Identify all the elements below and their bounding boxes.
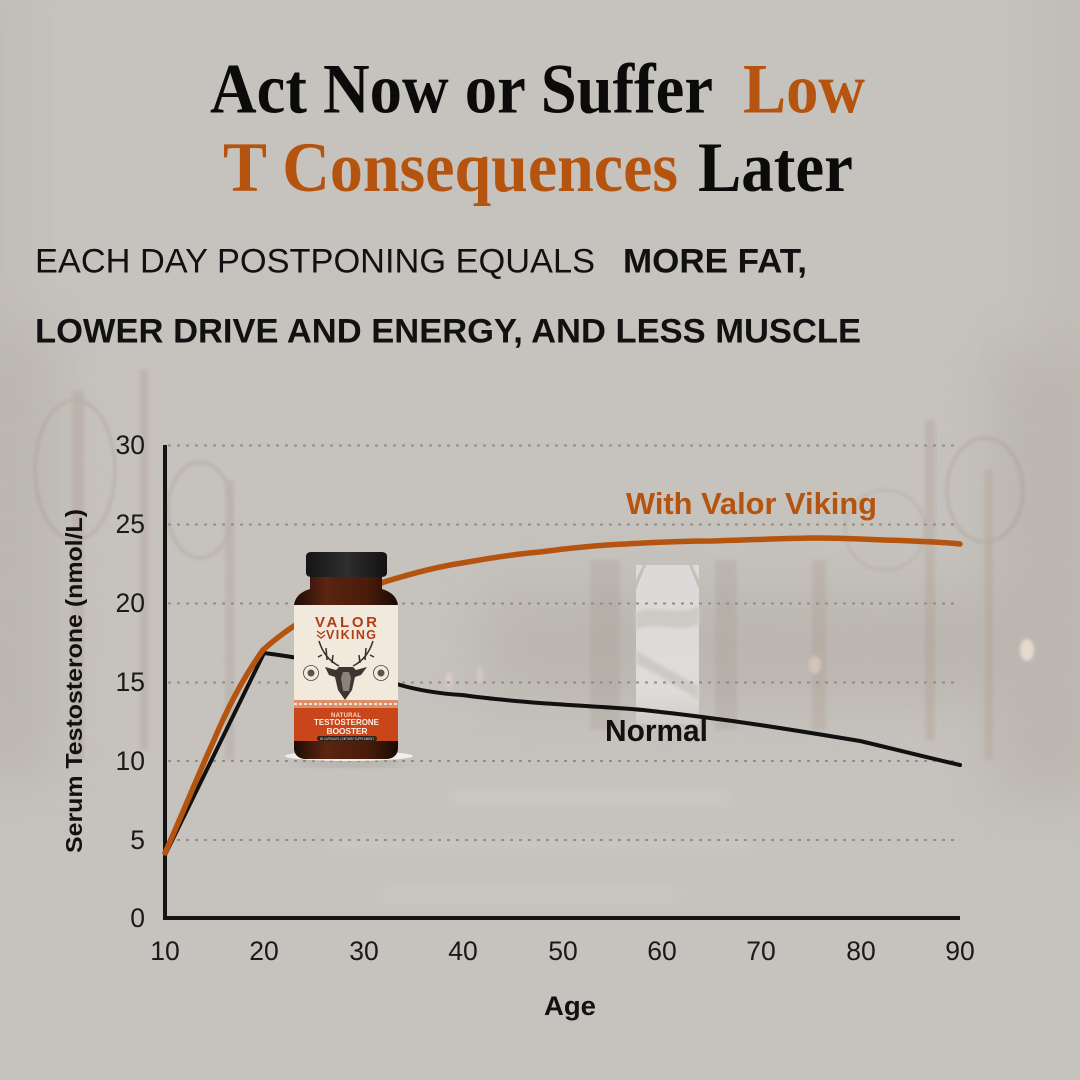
bottle label (294, 605, 398, 741)
background: bright doorway (636, 565, 699, 724)
y axis ticks: 25 (116, 509, 145, 539)
line chart (61, 430, 975, 1021)
x axis ticks: 10 (150, 936, 180, 966)
bottle label: 60 CAPSULES | DIETARY SUPPLEMENT (320, 737, 375, 741)
x axis ticks: 40 (448, 936, 478, 966)
subheading: EACH DAY POSTPONING EQUALS (35, 242, 595, 280)
x axis ticks (150, 936, 975, 966)
stag head icon (318, 641, 374, 700)
y axis ticks: 5 (130, 825, 145, 855)
product bottle (285, 552, 413, 766)
title: Later (698, 129, 853, 207)
x axis ticks: 50 (548, 936, 578, 966)
x axis ticks: 70 (746, 936, 776, 966)
bottle label: BOOSTER (326, 726, 368, 736)
axes (165, 445, 960, 918)
title: T Consequences (223, 129, 678, 207)
x axis ticks: 30 (349, 936, 379, 966)
x axis label: Age (544, 991, 596, 1021)
x axis ticks: 20 (249, 936, 279, 966)
title (210, 50, 865, 207)
subheading: LOWER DRIVE AND ENERGY, AND LESS MUSCLE (35, 312, 861, 350)
title: Low (743, 50, 865, 128)
bottle label: VIKING (326, 628, 376, 642)
y axis ticks: 0 (130, 903, 145, 933)
curve: with Valor Viking (165, 538, 960, 853)
bottle cap (306, 552, 387, 577)
y axis ticks: 30 (116, 430, 145, 460)
y axis ticks (116, 430, 145, 933)
subheading: MORE FAT, (623, 242, 807, 280)
bottle label: NATURAL (331, 713, 361, 719)
x axis ticks: 60 (647, 936, 677, 966)
y axis ticks: 15 (116, 667, 145, 697)
title: Act Now or Suffer (210, 50, 713, 128)
y axis ticks: 10 (116, 746, 145, 776)
curve: normal (165, 653, 960, 855)
y axis label: Serum Testosterone (nmol/L) (61, 509, 87, 853)
label: Normal: Normal (605, 713, 708, 748)
y axis ticks: 20 (116, 588, 145, 618)
background: candle flames (446, 639, 1034, 688)
bottle label: TESTOSTERONE (314, 717, 379, 727)
x axis ticks: 80 (846, 936, 876, 966)
x axis ticks: 90 (945, 936, 975, 966)
bottle label: VALOR (315, 614, 377, 631)
subheading (35, 242, 861, 350)
label: With Valor Viking: With Valor Viking (626, 486, 877, 521)
